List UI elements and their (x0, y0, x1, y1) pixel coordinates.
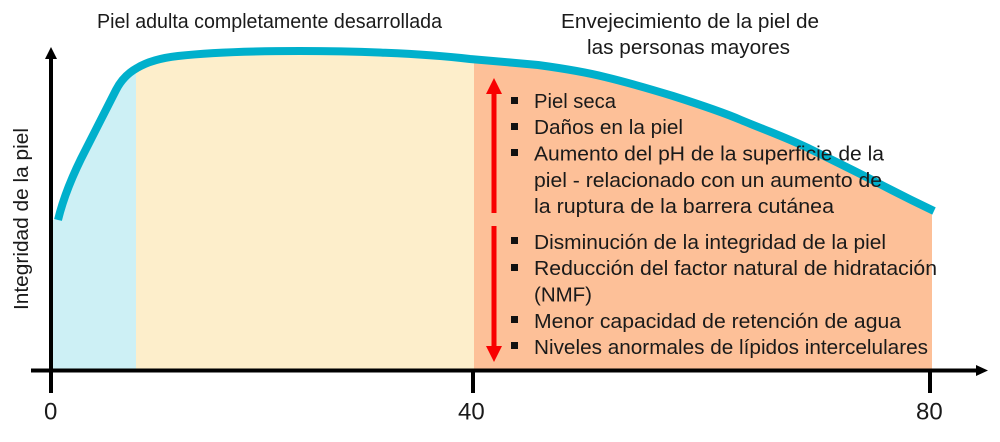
text block: upper list: Daños en la piel (534, 116, 683, 139)
text block: upper list: Aumento del pH de la superficie de la (534, 142, 885, 166)
heading: aged skin: Envejecimiento de la piel de (561, 10, 819, 33)
text block: upper list (511, 90, 885, 218)
panel: infant skin region (51, 68, 136, 370)
y axis label: Integridad de la piel (10, 128, 33, 310)
panel: adult skin region (136, 51, 474, 370)
x axis ticks (473, 370, 930, 393)
y axis (45, 47, 57, 393)
text block: lower list (511, 231, 937, 359)
x axis labels: 0 (44, 398, 57, 426)
text block: lower list: (NMF) (534, 284, 592, 306)
text block: upper list: la ruptura de la barrera cutánea (534, 195, 835, 218)
text block: lower list: Niveles anormales de lípidos intercelulares (534, 336, 928, 359)
x axis labels: 80 (916, 398, 943, 426)
text block: upper list: Piel seca (534, 90, 617, 113)
text block: lower list: Reducción del factor natural de hidratación (534, 257, 937, 280)
curve: skin integrity (58, 51, 934, 220)
heading: aged skin: las personas mayores (587, 36, 790, 59)
panel: aged skin region (474, 59, 932, 370)
text block: lower list: Disminución de la integridad de la piel (534, 231, 886, 254)
text block: lower list: Menor capacidad de retención de agua (534, 310, 902, 333)
x axis (31, 365, 988, 376)
arrow: up (486, 78, 502, 213)
text block: upper list: piel - relacionado con un aumento de (534, 169, 882, 192)
x axis labels (44, 398, 943, 426)
heading: adult skin: Piel adulta completamente desarrollada (97, 10, 443, 33)
heading: aged skin (561, 10, 819, 59)
x axis labels: 40 (458, 398, 485, 426)
arrow: down (486, 226, 502, 362)
